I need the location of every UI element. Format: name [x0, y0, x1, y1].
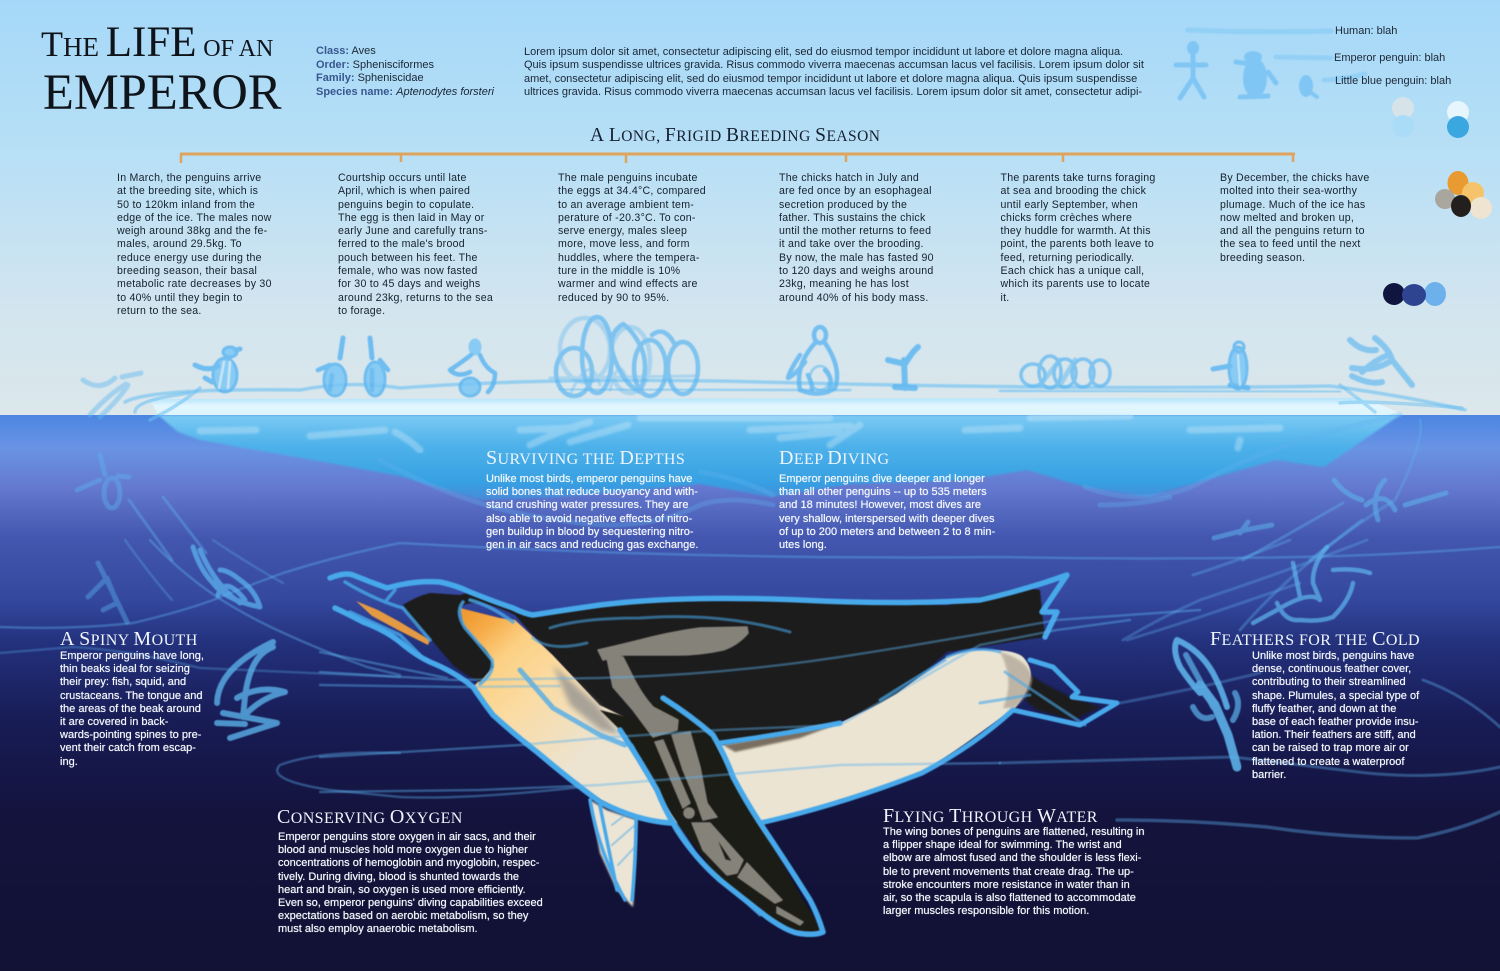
- penguin: standing with egg: [195, 347, 240, 392]
- body: The wing bones of penguins are flattened, resulting in a flipper shape ideal for swimming. The wrist and elbow are almost fused and the shoulder is less flexi- ble to prevent movements that create drag. The up- stroke encounters more resistance in water than in air, so the scapula is also flattened to accommodate larger muscles responsible for this motion.: [883, 826, 1144, 917]
- size legend: [1334, 25, 1451, 87]
- title: THE LIFE OF AN: [41, 19, 273, 66]
- panel: deep diving: [778, 447, 995, 551]
- colour palette swatches: [1383, 97, 1492, 306]
- timeline: April: Courtship occurs until late April, which is when paired penguins begin to copulate. The egg is then laid in May or early June and carefully trans- ferred to the male's brood pouch between his feet. The female, who was now fasted for 30 to 45 days and weighs around 23kg, returns to the sea to forage.: [338, 172, 493, 317]
- penguin: returning adult: [1213, 342, 1248, 389]
- heading: A SPINY MOUTH: [60, 628, 198, 650]
- penguin: fur shading: [553, 665, 620, 735]
- panel: flying through water: [882, 805, 1144, 917]
- heading: FLYING THROUGH WATER: [883, 805, 1098, 827]
- bone: digits: [738, 863, 803, 925]
- underwater sketch: feather: [1175, 640, 1238, 767]
- penguin: chick standing: [888, 347, 918, 388]
- body: Emperor penguins dive deeper and longer than all other penguins -- up to 535 meters and 18 minutes! However, most dives are very shallow, interspersed with deeper dives of up to 200 meters and between 2 to 8 min- utes long.: [779, 473, 995, 551]
- penguin: black back and head: [403, 587, 1045, 745]
- penguin: incubating male: [450, 338, 495, 396]
- bone: carpal: [684, 808, 694, 818]
- penguin: rear foot: [590, 800, 637, 907]
- timeline: December: By December, the chicks have molted into their sea-worthy plumage. Much of the ice has now melted and broken up, and all the penguins return to the sea to feed until the next breeding season.: [1220, 172, 1370, 264]
- bone: scapula: [598, 627, 748, 660]
- penguin: adult with chick: [788, 327, 837, 394]
- ice reflections in the water: [200, 416, 1280, 450]
- heading: DEEP DIVING: [779, 447, 889, 469]
- size legend: Emperor penguin: blah: [1334, 52, 1445, 64]
- penguin: leaping at left edge: [83, 373, 141, 417]
- underwater sketch: beak: [217, 642, 285, 738]
- bone: ulna: [672, 732, 717, 820]
- penguin: flipper: [600, 698, 823, 937]
- penguin: belly: [460, 608, 1031, 823]
- body: Emperor penguins store oxygen in air sacs, and their blood and muscles hold more oxygen due to higher concentrations of hemoglobin and myoglobin, respec- tively. During diving, blood is shunted towards the heart and brain, so oxygen is used more efficiently. Even so, emperor penguins' diving capabilities exceed expectations based on aerobic metabolism, so they must also employ anaerobic metabolism.: [278, 831, 543, 935]
- size legend: Little blue penguin: blah: [1335, 75, 1451, 87]
- icon: human: [1176, 41, 1206, 98]
- panel: conserving oxygen: [277, 806, 543, 935]
- heading: FEATHERS FOR THE COLD: [1210, 628, 1420, 650]
- penguin: shoulder shadow: [723, 723, 840, 752]
- ice shelf: [125, 380, 1465, 420]
- emperor penguin illustration: [320, 574, 1200, 937]
- body: Unlike most birds, emperor penguins have solid bones that reduce buoyancy and with- stand crushing water pressures. They are also able to avoid negative effects of nitro- gen buildup in blood by sequestering nitro- gen in air sacs and reducing gas exchange.: [486, 473, 698, 551]
- panel: a spiny mouth: [60, 628, 204, 768]
- leader lines: [1188, 30, 1365, 80]
- heading: CONSERVING OXYGEN: [277, 806, 463, 828]
- classification: Class: Aves Order: Sphenisciformes Family: Spheniscidae Species name: Aptenodytes forsteri: [316, 45, 494, 98]
- panel: feathers for the cold: [1210, 628, 1420, 781]
- breeding season heading: A LONG, FRIGID BREEDING SEASON: [590, 125, 880, 146]
- penguin: blue sketch outline: [330, 574, 1117, 934]
- timeline bar: [180, 154, 1295, 163]
- surface penguins: [83, 317, 1412, 417]
- timeline: September: The parents take turns foraging at sea and brooding the chick until early September, when chicks form crèches where they huddle for warmth. At this point, the parents both leave to feed, returning periodically. Each chick has a unique call, which its parents use to locate it.: [1000, 172, 1155, 304]
- penguin: skeleton: [598, 627, 803, 925]
- penguins: courting pair: [318, 338, 388, 396]
- panel: surviving the depths: [486, 447, 698, 551]
- penguin: tail foot: [1025, 675, 1100, 720]
- penguin: rear shading: [1000, 652, 1032, 708]
- penguin: leaping right: [1350, 338, 1412, 385]
- underwater sketch: penguin outlines left: [88, 547, 260, 622]
- title: [41, 19, 282, 120]
- icon: emperor penguin: [1236, 51, 1276, 98]
- timeline: July: The chicks hatch in July and are fed once by an esophageal secretion produced by the father. This sustains the chick until the mother returns to feed it and take over the brooding. By now, the male has fasted 90 to 120 days and weighs around 23kg, meaning he has lost around 40% of his body mass.: [779, 172, 934, 304]
- sky background: [0, 0, 1500, 415]
- penguin: creche huddle: [1021, 356, 1110, 388]
- ocean background: [0, 415, 1500, 971]
- title: EMPEROR: [43, 64, 282, 120]
- lines crossing the penguin: [320, 610, 1200, 792]
- bone: humerus: [607, 657, 678, 737]
- heading: SURVIVING THE DEPTHS: [486, 447, 685, 469]
- size comparison icons: [1176, 30, 1365, 98]
- bone: metacarpals: [692, 823, 743, 875]
- size legend: Human: blah: [1335, 25, 1397, 37]
- icon: little blue penguin: [1299, 75, 1317, 97]
- shallow water under the ice: [158, 415, 1400, 500]
- timeline: incubation: The male penguins incubate the eggs at 34.4°C, compared to an average ambient tem- perature of -20.3°C. To con- serve energy, males sleep more, move less, and form huddles, where the tempera- ture in the middle is 10% warmer and wind effects are reduced by 90 to 95%.: [558, 172, 706, 304]
- penguin huddle: [550, 317, 698, 396]
- intro text: Lorem ipsum dolor sit amet, consectetur adipiscing elit, sed do eiusmod tempor incididunt ut labore et dolore magna aliqua. Quis ipsum suspendisse ultrices gravida. Risus commodo viverra maecenas accumsan lacus vel facilisis. Lorem ipsum dolor sit amet, consectetur adipiscing elit, sed do eiusmod tempor incididunt ut labore et dolore magna aliqua. Quis ipsum suspendisse ultrices gravida. Risus commodo viverra maecenas accumsan lacus vel facilisis. Lorem ipsum dolor sit amet, consectetur adipi-: [524, 46, 1144, 98]
- underwater sketch: shallow diver: [77, 455, 129, 508]
- body: Emperor penguins have long, thin beaks ideal for seizing their prey: fish, squid, and crustaceans. The tongue and the areas of the beak around it are covered in back- wards-pointing spines to pre- vent their catch from escap- ing.: [60, 650, 204, 768]
- timeline: March: In March, the penguins arrive at the breeding site, which is 50 to 120km inland from the edge of the ice. The males now weigh around 38kg and the fe- males, around 29.5kg. To reduce energy use during the breeding season, their basal metabolic rate decreases by 30 to 40% until they begin to return to the sea.: [117, 172, 272, 317]
- body: Unlike most birds, penguins have dense, continuous feather cover, contributing to their streamlined shape. Plumules, a special type of fluffy feather, and down at the base of each feather provide insu- lation. Their feathers are stiff, and can be raised to trap more air or flattened to create a waterproof barrier.: [1252, 650, 1419, 781]
- bone: radius: [655, 740, 690, 808]
- long sketch lines in the water: [0, 415, 1500, 838]
- penguin: beak stripe: [356, 601, 430, 645]
- underwater sketches: upper right: [1214, 480, 1446, 623]
